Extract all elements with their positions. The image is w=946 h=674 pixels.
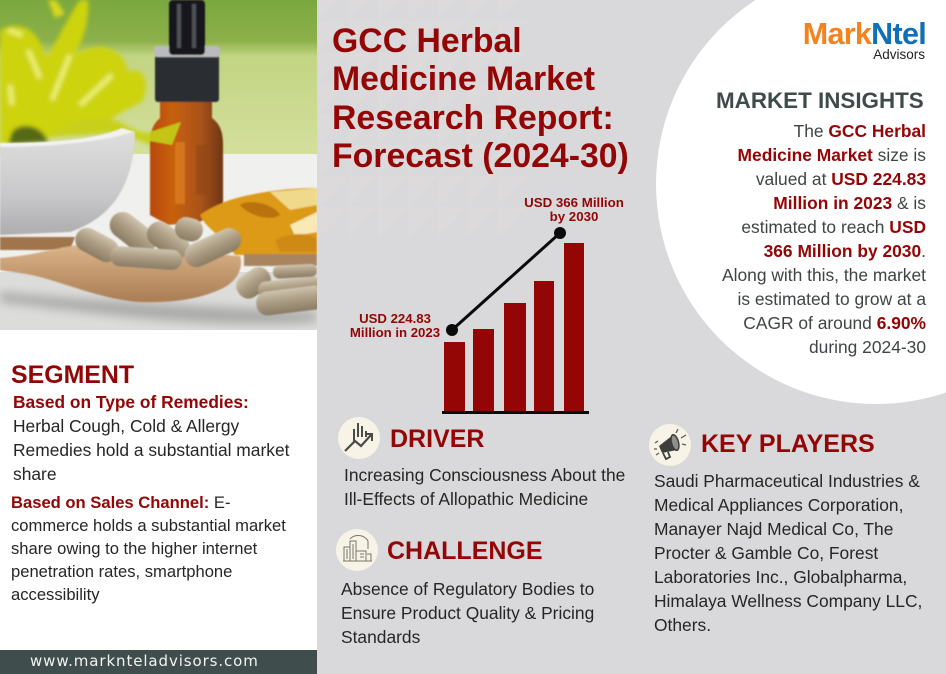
text: market insights paragraph: CAGR of around 6.90%: [743, 313, 926, 333]
label: 2023 value: USD 224.83: [359, 311, 431, 326]
text: sales channel: Based on Sales Channel: E-: [11, 493, 230, 512]
text: market insights paragraph: The GCC Herbal: [794, 121, 926, 141]
text: challenge: Ensure Product Quality & Pricing: [341, 603, 594, 623]
axis: [442, 411, 589, 414]
heading: driver: DRIVER: [390, 425, 484, 453]
text: market insights paragraph: 366 Million by 2030.: [764, 241, 926, 261]
text: key players: Procter & Gamble Co, Forest: [654, 543, 878, 563]
text: market insights paragraph: during 2024-30: [809, 337, 926, 357]
text: market insights paragraph: Medicine Market size is: [738, 145, 926, 165]
text: market insights paragraph: estimated to reach USD: [741, 217, 926, 237]
text: market insights paragraph: valued at USD 224.83: [756, 169, 926, 189]
text: key players: Laboratories Inc., Globalpharma,: [654, 567, 907, 587]
panel: white circle for market insights: [656, 0, 946, 404]
trend line: [446, 227, 566, 336]
text: market insights paragraph: is estimated to grow at a: [738, 289, 926, 309]
text: driver: Increasing Consciousness About the: [344, 465, 625, 485]
label: 2030 year: by 2030: [550, 209, 598, 224]
text: sales channel: commerce holds a substantial market: [11, 516, 286, 535]
heading: market insights: MARKET INSIGHTS: [716, 88, 924, 113]
heading: key players: KEY PLAYERS: [701, 430, 875, 458]
icon: challenge: [336, 529, 378, 571]
title: [332, 22, 629, 175]
bars: [444, 243, 584, 412]
text: driver: [344, 465, 625, 509]
text: sales channel: [11, 493, 286, 604]
text: key players: Others.: [654, 615, 711, 635]
logo: MarkNtel Advisors: Advisors: [873, 47, 925, 62]
text: market insights paragraph: Million in 2023 & is: [773, 193, 926, 213]
title: Research Report:: [332, 99, 614, 137]
title: GCC Herbal: [332, 22, 522, 60]
label: 2023 year: Million in 2023: [350, 325, 440, 340]
text: market insights paragraph: [722, 121, 926, 357]
heading: segment: SEGMENT: [11, 361, 134, 389]
panel: segment: [11, 361, 290, 604]
text: type of remedies: Remedies hold a substantial market: [13, 440, 289, 460]
title: Medicine Market: [332, 60, 595, 98]
logo: MarkNtel Advisors: MarkNtel: [803, 17, 926, 51]
text: key players: Medical Appliances Corporation,: [654, 495, 903, 515]
subheading: type of remedies: Based on Type of Remedies:: [13, 392, 249, 412]
icon: driver growth chart: [338, 417, 380, 459]
text: key players: Saudi Pharmaceutical Industries &: [654, 471, 920, 491]
text: challenge: Absence of Regulatory Bodies to: [341, 579, 594, 599]
decorative triangle pattern: [319, 0, 559, 238]
text: key players: Manayer Najd Medical Co, The: [654, 519, 893, 539]
label: 2030 value: USD 366 Million: [524, 195, 624, 210]
text: type of remedies: [13, 416, 290, 484]
text: type of remedies: share: [13, 464, 57, 484]
heading: challenge: CHALLENGE: [387, 537, 543, 565]
text: challenge: [341, 579, 594, 647]
title: Forecast (2024-30): [332, 137, 629, 175]
text: key players: [654, 471, 922, 635]
text: market insights paragraph: Along with this, the market: [722, 265, 926, 285]
text: sales channel: share owing to the higher internet: [11, 539, 257, 558]
bar chart: market growth 2023 to 2030: [350, 195, 624, 414]
text: sales channel: accessibility: [11, 585, 100, 604]
text: key players: Himalaya Wellness Company LLC,: [654, 591, 922, 611]
text: type of remedies: Herbal Cough, Cold & Allergy: [13, 416, 239, 436]
footer: website: [0, 650, 317, 674]
panel: left white column: [0, 0, 317, 674]
text: sales channel: penetration rates, smartphone: [11, 562, 232, 581]
icon: key players megaphone: [649, 424, 691, 466]
text: driver: Ill-Effects of Allopathic Medicine: [344, 489, 588, 509]
photo: herbal capsules, dropper bottle and flower: [0, 0, 317, 330]
footer: website: www.marknteladvisors.com: [30, 652, 259, 670]
text: challenge: Standards: [341, 627, 420, 647]
